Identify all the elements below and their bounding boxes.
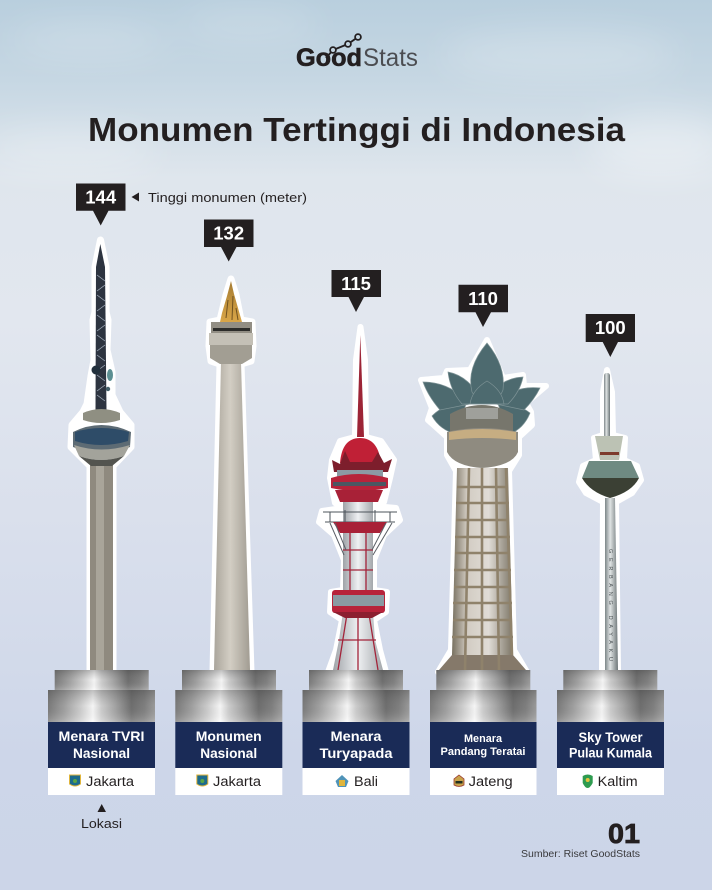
value badge: 100: 100 (595, 317, 626, 338)
name label (440, 733, 526, 758)
location: Jakarta: Jakarta (213, 774, 262, 789)
panel: Menara Pandang Teratai base (430, 670, 536, 795)
pedestal (557, 670, 664, 722)
tower: Menara TVRI Nasional (71, 240, 131, 672)
name label: Monumen (196, 728, 262, 744)
pedestal (48, 670, 155, 722)
name label (569, 730, 652, 760)
name label: Menara (464, 733, 503, 745)
name label (58, 728, 144, 761)
pedestal (430, 670, 536, 722)
pedestal (175, 670, 282, 722)
location: Jakarta: Jakarta (86, 774, 135, 789)
source: Sumber: Riset GoodStats (521, 848, 640, 860)
name label: Pandang Teratai (440, 746, 526, 758)
value badge: 115 (332, 270, 381, 312)
tower: Menara Pandang Teratai (421, 340, 546, 672)
legend: location annotation: Lokasi (81, 816, 122, 831)
name label (320, 728, 393, 761)
panel: Sky Tower Pulau Kumala base (557, 670, 664, 795)
location: Jateng: Jateng (469, 774, 513, 789)
legend: location annotation (81, 804, 122, 831)
value badge: 144: 144 (85, 186, 117, 208)
tower lettering: Gerbang Dayaku: GERBANG DAYAKU (607, 549, 613, 661)
page number: 01 (608, 818, 640, 849)
tower: Menara Turyapada (319, 327, 400, 672)
logo: GoodStats: Stats (363, 44, 418, 72)
location: Bali: Bali (354, 774, 378, 789)
logo: GoodStats: Good (296, 44, 362, 72)
title: Monumen Tertinggi di Indonesia (88, 111, 626, 148)
name label: Nasional (200, 745, 257, 761)
name label: Nasional (73, 745, 130, 761)
location: Kaltim: Kaltim (598, 774, 638, 789)
value badge: 110 (458, 285, 508, 327)
logo: GoodStats (296, 34, 418, 72)
panel: Menara Turyapada base (302, 670, 410, 795)
panel: Menara TVRI Nasional base (48, 670, 155, 795)
name label: Sky Tower (578, 730, 643, 745)
name label: Pulau Kumala (569, 746, 652, 760)
name label (196, 728, 262, 761)
tower: Monumen Nasional (209, 279, 253, 672)
legend: height annotation: Tinggi monumen (meter) (148, 190, 307, 205)
value badge: 132: 132 (213, 222, 244, 244)
name label: Turyapada (320, 745, 393, 761)
value badge: 110: 110 (468, 288, 498, 309)
panel: Monumen Nasional base (175, 670, 282, 795)
value badge: 115: 115 (341, 273, 371, 294)
pedestal (302, 670, 410, 722)
name label: Menara (330, 728, 382, 744)
tower: Sky Tower Pulau Kumala (579, 370, 641, 672)
name label: Menara TVRI (58, 728, 144, 744)
value badge: 132 (204, 220, 254, 262)
value badge: 144 (76, 184, 126, 226)
value badge: 100 (586, 314, 635, 357)
